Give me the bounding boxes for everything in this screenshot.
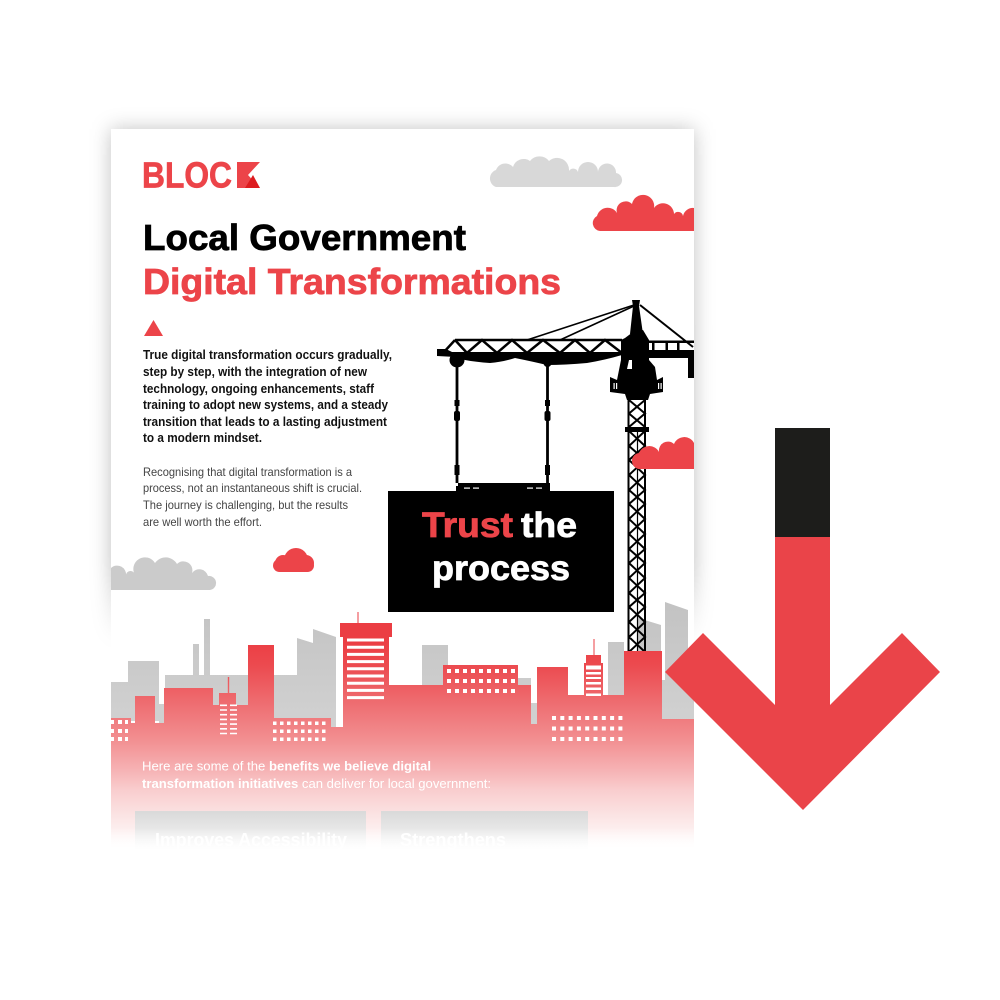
arrow shaft top (775, 428, 830, 538)
windows: left edge (111, 720, 128, 741)
windows: right tower bars (586, 666, 601, 696)
title: Local Government (143, 217, 466, 258)
crane counter jib (649, 340, 694, 378)
crane (437, 300, 694, 652)
benefits intro text: transformation initiatives can deliver for local government: (142, 777, 491, 791)
cloud: red behind crane (632, 437, 694, 469)
grey background buildings (111, 602, 694, 730)
sign board (388, 491, 614, 612)
windows: small tower bars (220, 704, 237, 734)
page shadow (111, 129, 694, 640)
hanger spreader (456, 483, 550, 492)
card: strengthens (381, 811, 588, 851)
logo: BLOC (142, 154, 232, 196)
intro text regular: Recognising that digital transformation is a (143, 465, 352, 479)
intro text regular (143, 465, 362, 529)
title (143, 217, 561, 302)
intro text bold (143, 348, 392, 445)
crane cab slots (614, 383, 662, 389)
triangle marker (144, 320, 163, 336)
infographic page (100, 129, 710, 856)
skyline windows (111, 638, 622, 741)
hanger right (544, 359, 552, 483)
benefits intro text (142, 760, 491, 791)
crane jib lower chord (437, 349, 622, 365)
intro text regular: are well worth the effort. (143, 515, 262, 529)
cloud: grey left (111, 557, 216, 590)
card: strengthens: Strengthens (400, 830, 506, 850)
windows: right block (552, 716, 622, 741)
crane jib truss (444, 340, 622, 353)
windows: low block left (273, 722, 326, 741)
intro text bold: to a modern mindset. (143, 431, 262, 445)
hanger left (450, 352, 464, 483)
windows: parapet block (447, 669, 515, 693)
intro text bold: technology, ongoing enhancements, staff (143, 382, 375, 396)
sign heading: Trust (422, 506, 513, 545)
arrow head and shaft (665, 537, 940, 810)
bottom white fade (100, 828, 710, 856)
cloud: red top right (593, 195, 694, 231)
card: improves accessibility (135, 811, 366, 851)
cloud: grey top (490, 156, 622, 187)
crane cables (527, 305, 693, 347)
benefits intro text: Here are some of the benefits we believe digital (142, 760, 431, 774)
intro text bold: transition that leads to a lasting adjustment (143, 415, 388, 429)
sign heading line two: process (432, 549, 570, 588)
crane mast ring (625, 427, 649, 432)
card: improves accessibility: Improves Accessibility (155, 830, 347, 850)
windows: tall tower bars (347, 638, 384, 699)
red skyline (111, 612, 694, 850)
intro text bold: step by step, with the integration of new (143, 365, 367, 379)
crane mast lattice (628, 400, 645, 652)
sign heading continued: the (521, 506, 577, 545)
intro text bold: training to adopt new systems, and a steady (143, 398, 388, 412)
cloud: small red (273, 548, 314, 572)
download arrow (665, 428, 940, 810)
title: Digital Transformations (143, 261, 561, 302)
intro text bold: True digital transformation occurs gradually, (143, 348, 392, 362)
intro text regular: process, not an instantaneous shift is crucial. (143, 481, 362, 495)
crane apex (630, 300, 643, 334)
crane cab window (627, 360, 632, 369)
crane cab (610, 330, 663, 400)
intro text regular: The journey is challenging, but the results (143, 498, 348, 512)
